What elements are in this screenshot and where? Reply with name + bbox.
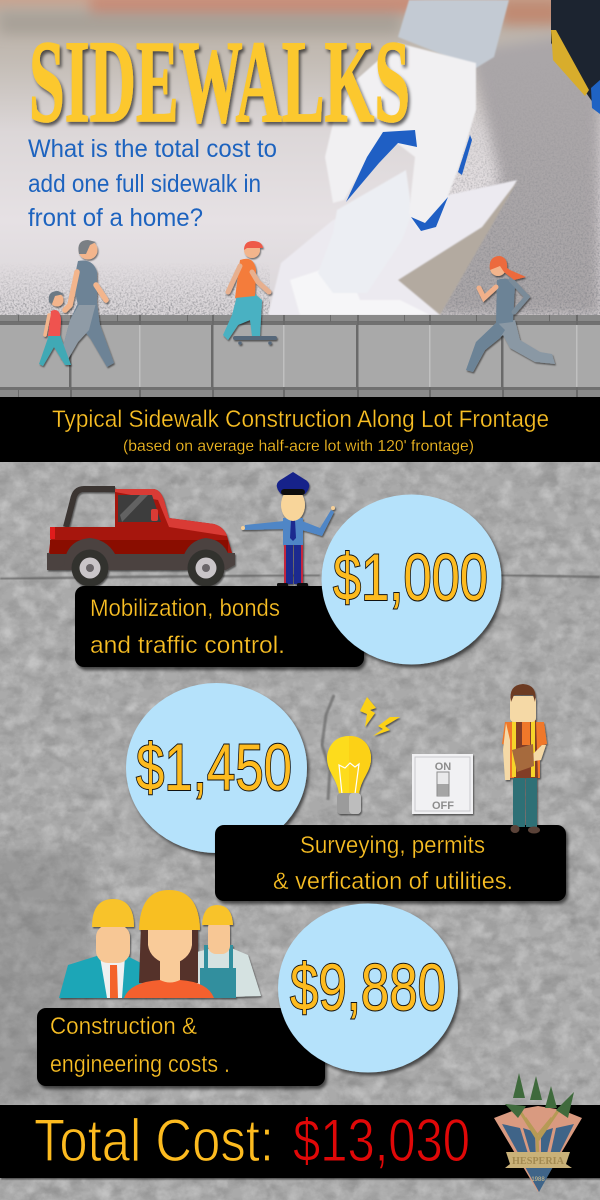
- figure: woman jogging: [466, 256, 555, 372]
- band heading: Typical Sidewalk Construction Along Lot Frontage: [52, 406, 549, 433]
- total cost label: Total Cost:: [34, 1107, 274, 1174]
- label: surveying: Surveying, permits: [300, 832, 485, 859]
- icon: light bulb: [327, 736, 371, 814]
- photo object: trowel handle: [318, 170, 412, 293]
- photo object: glove cuff: [398, 0, 509, 68]
- icon: on off switch: ON: [435, 761, 451, 773]
- label: surveying: & verfication of utilities.: [273, 868, 513, 895]
- photo object: white glove: [325, 42, 477, 204]
- subtitle question: front of a home?: [28, 204, 203, 232]
- total cost band: [0, 1105, 600, 1178]
- panel: mobilization: [47, 472, 502, 667]
- label: surveying: [273, 832, 513, 895]
- photo object: trowel blade: [268, 180, 518, 315]
- label: mobilization: and traffic control.: [90, 632, 285, 659]
- icon: surveyor with clipboard: [502, 684, 547, 834]
- child: [39, 291, 71, 366]
- card: construction label: [37, 1008, 325, 1086]
- panel: surveying: [126, 683, 566, 901]
- icon: red jeep: [47, 489, 235, 586]
- icon: on off switch: [412, 754, 473, 814]
- icon: city of Hesperia seal: 1988: [531, 1177, 545, 1183]
- photo object: dark gear top right: [551, 0, 600, 114]
- photo object: blue glove trim: [346, 130, 472, 231]
- concrete background: [0, 462, 600, 1200]
- right worker: [197, 905, 261, 998]
- label: mobilization: Mobilization, bonds: [90, 595, 280, 622]
- price circle: $9,880: [278, 904, 458, 1072]
- center woman: [124, 890, 214, 998]
- band subheading: (based on average half-acre lot with 120' frontage): [123, 438, 474, 455]
- father: [60, 240, 114, 367]
- label: construction: engineering costs .: [50, 1051, 230, 1078]
- header band: [0, 397, 600, 462]
- card: surveying label: [215, 825, 566, 901]
- card: mobilization label: [75, 586, 364, 667]
- subtitle question: What is the total cost to: [28, 135, 277, 163]
- total cost amount: $13,030: [293, 1107, 470, 1174]
- price circle: $1,000: [322, 494, 502, 664]
- subtitle question: add one full sidewalk in: [28, 170, 261, 198]
- left worker: [59, 899, 145, 998]
- label: mobilization: [90, 595, 285, 659]
- figure: skateboarder: [223, 241, 277, 345]
- icon: city of Hesperia seal: [494, 1073, 582, 1192]
- panel: hero photo: [0, 0, 600, 315]
- icon: three workers: [59, 890, 261, 998]
- subtitle question: [28, 135, 277, 232]
- icon: police officer: [241, 472, 335, 587]
- sidewalk strip: [0, 315, 600, 397]
- figure: father walking with child: [39, 240, 114, 367]
- panel: construction: [37, 890, 458, 1086]
- price: $9,880: $9,880: [290, 950, 446, 1024]
- label: construction: [50, 1013, 230, 1078]
- price: $1,450: $1,450: [136, 730, 292, 804]
- price: $1,000: $1,000: [333, 540, 488, 614]
- icon: city of Hesperia seal: HESPERIA: [512, 1155, 564, 1167]
- price circle: $1,450: [126, 683, 307, 853]
- icon: lightning bolts: [360, 697, 400, 736]
- icon: on off switch: OFF: [432, 800, 454, 812]
- label: construction: Construction &: [50, 1013, 197, 1040]
